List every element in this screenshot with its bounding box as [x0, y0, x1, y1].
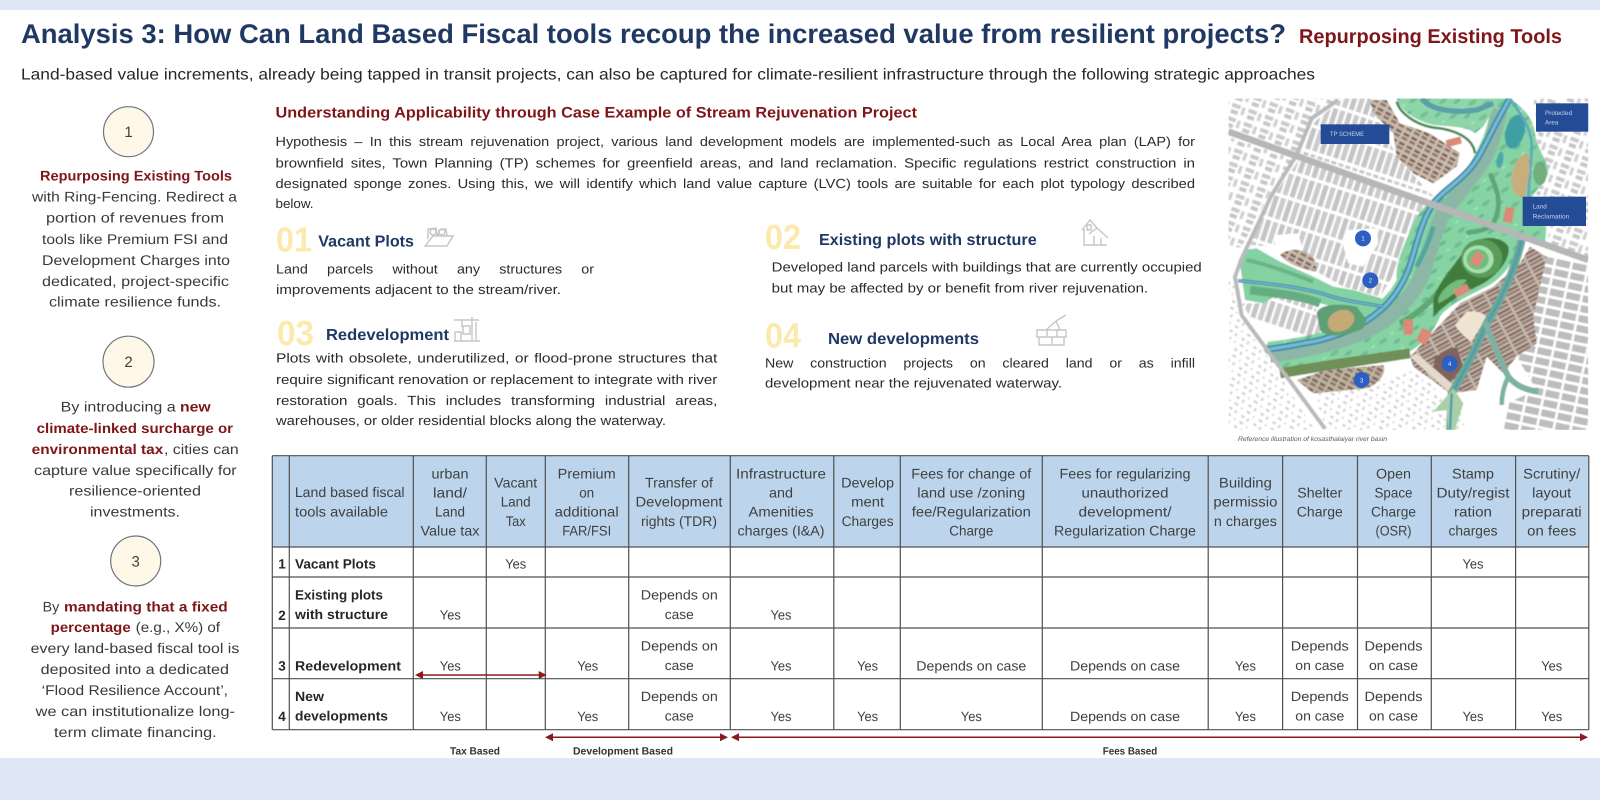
- table header row: Scrutiny/: [1523, 465, 1580, 481]
- table header row: Charge: [1297, 504, 1343, 520]
- row 2: existing plots with structure: [278, 587, 792, 623]
- table header row: Amenities: [748, 504, 814, 520]
- table header row: on fees: [1527, 523, 1576, 539]
- plot type 01: vacant plots: [276, 221, 595, 297]
- canals: [1433, 240, 1538, 430]
- label: TP scheme: TP SCHEME: [1330, 131, 1364, 138]
- numbered plot markers: 4: [1448, 361, 1452, 368]
- row 4: new developments: Yes: [1541, 709, 1562, 724]
- label: land reclamation: Land: [1533, 203, 1547, 210]
- label: protected area: Area: [1545, 119, 1559, 126]
- table header row: (OSR): [1376, 523, 1412, 539]
- map caption: Reference illustration of kosasthalaiyar river basin: [1238, 436, 1387, 443]
- table header row: Premium: [558, 465, 616, 481]
- urban fabric: [1228, 98, 1588, 430]
- table header row: Development: [636, 494, 723, 510]
- approach 2 text: By introducing a: [61, 399, 176, 415]
- row 4: new developments: Yes: [1235, 709, 1256, 724]
- row 3: redevelopment: Yes: [440, 658, 461, 674]
- label: TP scheme: [1321, 124, 1389, 144]
- table header row: Stamp: [1452, 465, 1494, 481]
- table header row: ment: [851, 494, 884, 510]
- row 3: redevelopment: Yes: [577, 658, 598, 674]
- row 4: new developments: Depends: [1291, 689, 1349, 704]
- table header row: Regularization Charge: [1054, 523, 1196, 539]
- table header row: Value tax: [420, 523, 480, 539]
- plot type 03: redevelopment: [275, 314, 718, 428]
- approach 2 text: resilience-oriented: [69, 483, 201, 499]
- approach 1 text: dedicated, project-specific: [42, 273, 229, 289]
- row 4: new developments: on case: [1369, 709, 1418, 724]
- row 3: redevelopment: Depends: [1364, 639, 1423, 654]
- plot type 04: new developments: New construction projects on cleared land or as infill: [765, 355, 1195, 370]
- table header row: Charges: [842, 513, 894, 529]
- plot type 04: new developments: development near the rejuvenated waterway.: [765, 376, 1062, 391]
- row 2: existing plots with structure: Existing plots: [295, 587, 383, 602]
- plot type 03: redevelopment: Plots with obsolete, underutilized, or flood-prone structures that: [276, 351, 718, 366]
- hypothesis paragraph: designated sponge zones. Using this, we will identify which land value capture (LVC) tools are suitable for each plot typology described: [276, 176, 1195, 191]
- table header row: fee/Regularization: [912, 504, 1031, 520]
- lakes: [1317, 98, 1547, 335]
- table header row: additional: [555, 504, 619, 520]
- row 1: vacant plots: Yes: [505, 556, 526, 571]
- approach 1 text: Repurposing Existing Tools: [40, 168, 232, 184]
- approach 1 text: [31, 168, 237, 310]
- icon: crane over building: [454, 317, 480, 341]
- numbered plot markers: 2: [1369, 277, 1372, 284]
- table header row: charges: [1448, 523, 1498, 539]
- plot type 04: new developments: 04: [765, 317, 801, 356]
- title tag: repurposing existing tools: Repurposing Existing Tools: [1299, 26, 1562, 48]
- map labels: [1321, 103, 1588, 226]
- southern green strip and plots: [1280, 353, 1410, 393]
- approach 1 number circle: 1: [124, 124, 133, 141]
- row 1: vacant plots: [278, 556, 1484, 571]
- row 4: new developments: Yes: [440, 709, 461, 724]
- approach 3 text: By: [43, 599, 59, 615]
- table header row: urban: [432, 465, 468, 481]
- numbered plot markers: 3: [1360, 377, 1363, 384]
- row 4: new developments: [278, 689, 1562, 724]
- table header row: layout: [1532, 484, 1571, 500]
- table header row: on: [579, 484, 594, 500]
- approach 2 text: capture value specifically for: [34, 462, 237, 478]
- approach 1 text: portion of revenues from: [46, 210, 224, 226]
- river corridor: [1238, 98, 1548, 373]
- row 3: redevelopment: on case: [1369, 658, 1418, 673]
- row 4: new developments: Yes: [857, 709, 878, 724]
- plot type 01: vacant plots: Land parcels without any structures or: [276, 261, 595, 276]
- approach 1 text: tools like Premium FSI and: [42, 231, 228, 247]
- table header row: Land based fiscal: [295, 484, 405, 500]
- table header row: tools available: [295, 504, 388, 520]
- row 3: redevelopment: on case: [1295, 658, 1344, 673]
- panel: strategic approaches left column: [31, 107, 239, 740]
- row 2: existing plots with structure: with structure: [294, 607, 389, 622]
- table header row: permissio: [1213, 494, 1278, 510]
- approach 3 text: term climate financing.: [54, 724, 217, 740]
- row 2: existing plots with structure: 2: [278, 608, 286, 623]
- label: development based: Development Based: [573, 745, 673, 757]
- row 4: new developments: case: [665, 709, 694, 724]
- row 3: redevelopment: Depends on case: [916, 658, 1026, 674]
- row 4: new developments: on case: [1295, 709, 1344, 724]
- icon: houses: [1082, 220, 1108, 245]
- plot type 04: new developments: New developments: [828, 331, 979, 348]
- plot type 03: redevelopment: Redevelopment: [326, 327, 450, 344]
- table header row: preparati: [1522, 504, 1582, 520]
- row 3: redevelopment: Yes: [1541, 658, 1562, 674]
- approach 2 text: investments.: [90, 504, 180, 520]
- table header row: charges (I&A): [738, 523, 824, 539]
- label: land reclamation: Reclamation: [1533, 213, 1569, 220]
- row 4: new developments: Yes: [770, 709, 792, 724]
- arrow: tax based span: [415, 671, 547, 679]
- approach 3 text: every land-based fiscal tool is: [31, 640, 239, 656]
- row 3: redevelopment: Depends on: [641, 639, 718, 654]
- table header row: Develop: [841, 475, 894, 491]
- row 3: redevelopment: [278, 639, 1562, 674]
- bottom band: [0, 758, 1600, 800]
- approach 3 text: ‘Flood Resilience Account’,: [42, 682, 228, 698]
- approach 3 text: deposited into a dedicated: [41, 661, 229, 677]
- plot type 02: existing plots with structure: Existing plots with structure: [819, 232, 1037, 249]
- subtitle: Land-based value increments, already being tapped in transit projects, can also be captured for climate-resilient infrastructure through the following strategic approaches: [21, 66, 1315, 83]
- approach 2 text: [32, 399, 239, 520]
- plot type 01: vacant plots: Vacant Plots: [318, 234, 414, 251]
- row 3: redevelopment: Depends: [1291, 639, 1349, 654]
- row 4: new developments: Yes: [1462, 709, 1484, 724]
- approach 3 text: mandating that a fixed: [64, 599, 228, 615]
- eastern development blocks: [1410, 247, 1547, 393]
- table header row: Open: [1376, 465, 1411, 481]
- panel: case example heading: Understanding Applicability through Case Example of Stream Rejuvenation Project: [276, 105, 917, 122]
- approach 2 text: climate-linked surcharge or: [37, 420, 234, 436]
- row 3: redevelopment: case: [665, 658, 694, 673]
- approach 1 text: climate resilience funds.: [49, 294, 221, 310]
- table header row: unauthorized: [1082, 484, 1168, 500]
- table header row: Land: [435, 504, 465, 520]
- row 2: existing plots with structure: Yes: [770, 608, 792, 622]
- roads: [1228, 100, 1588, 429]
- approach 3 text: [31, 599, 239, 740]
- table header row: n charges: [1214, 513, 1277, 529]
- numbered plot markers: 1: [1361, 235, 1365, 242]
- table header row: development/: [1078, 504, 1172, 520]
- table header row: Transfer of: [645, 475, 713, 491]
- label: fees based: Fees Based: [1103, 745, 1157, 757]
- table header row: ration: [1454, 504, 1492, 520]
- numbered plot markers: [1354, 230, 1458, 388]
- plot type 01: vacant plots: 01: [276, 221, 312, 260]
- approach 2 number circle: 2: [124, 354, 133, 371]
- row 3: redevelopment: Yes: [1235, 658, 1256, 674]
- row 4: new developments: Depends: [1364, 689, 1423, 704]
- table header row: Shelter: [1297, 484, 1343, 500]
- row 4: new developments: New: [295, 689, 325, 704]
- table header row: Fees for regularizing: [1060, 465, 1190, 481]
- row 4: new developments: Yes: [961, 709, 982, 724]
- hypothesis paragraph: Hypothesis – In this stream rejuvenation project, various land development models are implemented-such as Local Area plan (LAP) for: [276, 134, 1196, 149]
- label: tax based: Tax Based: [450, 745, 500, 757]
- row 2: existing plots with structure: Depends on: [641, 587, 718, 602]
- plot type 02: existing plots with structure: [765, 218, 1202, 296]
- plot type 02: existing plots with structure: but may be affected by or benefit from river rejuvenation.: [772, 281, 1148, 296]
- approach 3 text: (e.g., X%) of: [136, 619, 220, 635]
- table: land based fiscal tools: [272, 456, 1589, 730]
- approach 3 number circle: 3: [132, 554, 140, 570]
- row 4: new developments: Depends on case: [1070, 709, 1180, 724]
- label: land reclamation: [1523, 197, 1586, 226]
- icon: land map: [425, 228, 453, 246]
- plot type 03: redevelopment: restoration goals. This includes transforming industrial areas,: [276, 393, 717, 408]
- approach 3 number circle: [111, 536, 161, 586]
- plot type 04: new developments: [765, 315, 1195, 391]
- site plan map illustration: [1228, 98, 1588, 430]
- label: protected area: [1536, 103, 1588, 132]
- hypothesis paragraph: [276, 134, 1196, 211]
- table header row: [272, 456, 1589, 547]
- approach 2 text: new: [180, 399, 211, 415]
- row 2: existing plots with structure: Yes: [440, 608, 461, 622]
- row 3: redevelopment: Depends on case: [1070, 658, 1180, 674]
- icon: bricks and trowel: [1037, 315, 1066, 345]
- table header row: rights (TDR): [641, 513, 717, 529]
- arrow: development based span: [545, 733, 728, 741]
- table header row: and: [769, 484, 793, 500]
- northern development blocks: [1280, 100, 1460, 272]
- hypothesis paragraph: brownfield sites, Town Planning (TP) schemes for greenfield areas, and land reclamation. Specific regulations restrict construction in: [276, 156, 1195, 170]
- plot type 02: existing plots with structure: Developed land parcels with buildings that are currently occupied: [772, 260, 1202, 275]
- row 1: vacant plots: Yes: [1462, 556, 1484, 571]
- top band: [0, 0, 1600, 10]
- approach 2 text: , cities can: [164, 441, 239, 457]
- row 4: new developments: Yes: [577, 709, 598, 724]
- plot type 02: existing plots with structure: 02: [765, 218, 801, 257]
- table header row: land use /zoning: [917, 484, 1025, 500]
- title: Analysis 3: How Can Land Based Fiscal tools recoup the increased value from resilient projects?: [21, 19, 1286, 49]
- approach 2 text: environmental tax: [32, 441, 164, 457]
- table header row: Vacant: [494, 475, 537, 491]
- row 1: vacant plots: 1: [278, 556, 286, 571]
- plot type 01: vacant plots: improvements adjacent to the stream/river.: [276, 282, 561, 297]
- table header row: Charge: [1371, 504, 1416, 520]
- table header row: land/: [433, 484, 467, 500]
- table header row: FAR/FSI: [562, 523, 611, 539]
- stadium green: [1433, 238, 1509, 317]
- row 2: existing plots with structure: case: [665, 607, 694, 622]
- row 3: redevelopment: Yes: [770, 658, 792, 674]
- approach 2 number circle: [103, 336, 154, 387]
- row 3: redevelopment: Yes: [857, 658, 878, 674]
- plot type 03: redevelopment: 03: [277, 314, 314, 353]
- table header row: Space: [1374, 484, 1413, 500]
- table header row: Land: [501, 494, 531, 510]
- hypothesis paragraph: below.: [276, 196, 314, 211]
- sports fields: [1404, 136, 1515, 345]
- row 4: new developments: 4: [278, 709, 286, 724]
- approach 3 text: percentage: [51, 619, 131, 635]
- row 3: redevelopment: Redevelopment: [295, 658, 402, 674]
- approach 1 number circle: [104, 107, 154, 157]
- row 3: redevelopment: 3: [278, 658, 286, 674]
- table header row: Building: [1219, 475, 1272, 491]
- table header row: Fees for change of: [911, 465, 1031, 481]
- row 1: vacant plots: Vacant Plots: [295, 556, 376, 571]
- approach 1 text: with Ring-Fencing. Redirect a: [31, 189, 237, 205]
- label: protected area: Protected: [1545, 110, 1572, 117]
- approach 3 text: we can institutionalize long-: [35, 703, 235, 719]
- table header row: Tax: [506, 513, 526, 529]
- arrow: fees based span: [731, 733, 1588, 741]
- table header row: Infrastructure: [736, 465, 826, 481]
- row 4: new developments: Depends on: [641, 689, 718, 704]
- row 4: new developments: developments: [295, 709, 388, 724]
- plot type 03: redevelopment: require significant renovation or replacement to integrate with river: [276, 372, 718, 387]
- plot type 03: redevelopment: warehouses, or older residential blocks along the waterway.: [275, 413, 666, 428]
- table header row: Charge: [949, 523, 994, 539]
- table header row: Duty/regist: [1436, 484, 1510, 500]
- approach 1 text: Development Charges into: [42, 252, 230, 268]
